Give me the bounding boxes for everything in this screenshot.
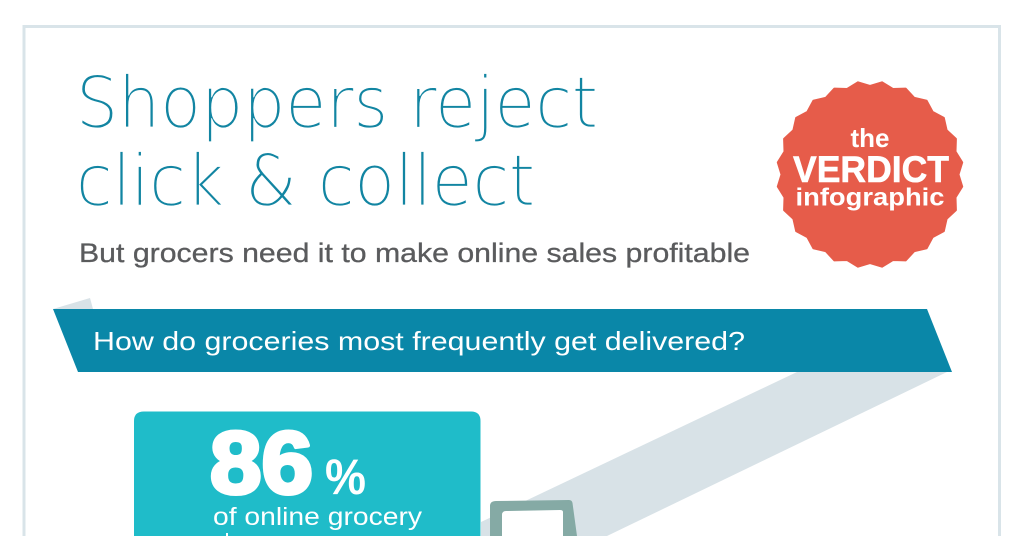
badge text: VERDICT (793, 149, 949, 190)
top of the cropped next caption line (226, 533, 228, 536)
bag handle frame (490, 500, 577, 536)
title: click & collect (76, 140, 535, 222)
title (76, 62, 598, 222)
badge text: infographic (796, 184, 945, 212)
banner heading: How do groceries most frequently get delivered? (93, 326, 745, 356)
badge text: the (850, 123, 890, 153)
panel: 86% statistic (134, 412, 480, 536)
big number: 86 (210, 413, 313, 512)
badge: the Verdict infographic (778, 82, 962, 267)
statistic caption: of online grocery (213, 503, 423, 531)
badge text (793, 123, 949, 212)
percent sign: % (325, 449, 366, 505)
subtitle: But grocers need it to make online sales profitable (79, 238, 750, 268)
icon: shopping bag handle (490, 500, 577, 536)
title: Shoppers reject (76, 62, 598, 144)
banner shadow: long beam (481, 372, 947, 536)
banner (53, 309, 952, 372)
banner shadow: left fold (53, 298, 93, 309)
panel background (134, 412, 480, 536)
bag interior (500, 508, 566, 536)
banner ribbon (53, 309, 952, 372)
badge scalloped seal (778, 82, 962, 267)
